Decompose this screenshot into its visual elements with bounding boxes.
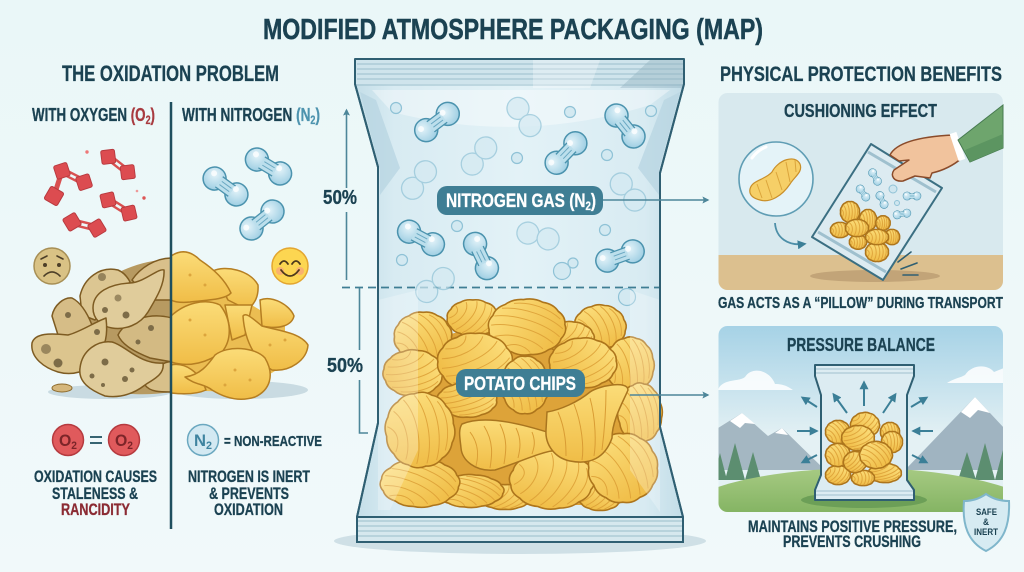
label: with nitrogen: 2: [310, 113, 316, 127]
equation: oxygen reacts: O: [115, 431, 128, 450]
measure: lower 50%: 50%: [327, 355, 363, 377]
small tilted bag: [812, 144, 942, 280]
fill line: [342, 286, 660, 288]
panel: the oxidation problem: [32, 61, 322, 529]
caption: nitrogen inert: & PREVENTS: [209, 484, 289, 503]
caption: oxidation causes: OXIDATION CAUSES: [34, 467, 157, 486]
label: potato chips: POTATO CHIPS: [464, 374, 576, 395]
bag shadow: [334, 528, 706, 554]
equation: nitrogen non-reactive: N: [194, 431, 206, 450]
label: nitrogen gas: [437, 186, 708, 215]
label: nitrogen gas: ): [591, 191, 596, 212]
label: potato chips: [456, 369, 708, 397]
nitrogen molecules: [199, 144, 296, 245]
equation: nitrogen non-reactive: = NON-REACTIVE: [224, 433, 322, 450]
bag folds: [360, 90, 680, 195]
label: with oxygen: 2: [146, 113, 151, 127]
caption: positive pressure: MAINTAINS POSITIVE PRESSURE,: [748, 517, 957, 536]
stale chip pile: [32, 258, 172, 399]
central bag diagram: [323, 59, 708, 554]
equation: oxygen reacts: 2: [71, 440, 77, 452]
panel: physical protection: [713, 63, 1011, 551]
caption: nitrogen inert: [188, 467, 310, 519]
label: with oxygen: ): [151, 105, 155, 125]
icon: happy face: [272, 248, 308, 284]
caption: oxidation causes: RANCIDITY: [61, 500, 130, 519]
title: MODIFIED ATMOSPHERE PACKAGING (MAP): [263, 14, 763, 46]
nitrogen molecules in bag: [390, 93, 656, 307]
icon: chip in bubble: [739, 142, 813, 216]
badge: safe and inert: &: [983, 517, 989, 528]
label: with oxygen: WITH OXYGEN (O: [32, 105, 160, 125]
equation: nitrogen non-reactive: 2: [206, 440, 212, 452]
divider: [170, 102, 172, 529]
icon: sad face: [34, 248, 70, 284]
fresh chip pile: [171, 252, 308, 399]
caption: oxidation causes: STALENESS &: [52, 484, 138, 503]
arrow: to bag: [775, 223, 804, 244]
equation: oxygen reacts: [52, 424, 140, 456]
oxygen molecules: [44, 143, 146, 240]
label: nitrogen gas: NITROGEN GAS (N: [446, 191, 618, 212]
card: pressure balance: [713, 326, 1011, 513]
pressure arrows: [797, 383, 933, 462]
card heading: PRESSURE BALANCE: [787, 335, 935, 355]
label: with nitrogen: ): [315, 105, 320, 125]
caption: nitrogen inert: OXIDATION: [214, 500, 283, 519]
label: with nitrogen: WITH NITROGEN (N: [182, 105, 328, 125]
card: cushioning effect: [718, 93, 1004, 291]
potato chips in bag: [365, 290, 670, 517]
heading: oxidation problem: THE OXIDATION PROBLEM: [62, 61, 279, 86]
caption: positive pressure: [748, 517, 957, 551]
badge: safe and inert: SAFE: [976, 507, 997, 518]
equation: oxygen reacts: O: [59, 431, 72, 450]
badge: safe and inert: INERT: [974, 527, 998, 538]
caption: nitrogen inert: NITROGEN IS INERT: [188, 467, 310, 486]
top seal: [356, 60, 683, 88]
badge: safe and inert: [964, 494, 1009, 551]
bag body: [355, 59, 684, 542]
equation: oxygen reacts: 2: [127, 440, 133, 452]
caption: positive pressure: PREVENTS CRUSHING: [783, 532, 921, 551]
caption: oxidation causes: [34, 467, 157, 519]
measure: lower 50%: [327, 288, 368, 433]
bottom seal: [355, 84, 684, 542]
label: nitrogen gas: 2: [585, 199, 591, 213]
measure: upper 50%: 50%: [323, 187, 357, 209]
impact lines: [898, 252, 918, 275]
card heading: CUSHIONING EFFECT: [784, 101, 937, 121]
bag gloss: [378, 290, 660, 512]
inflated bag: [815, 365, 914, 500]
equation: nitrogen non-reactive: [188, 424, 322, 456]
icon: hand with sleeve: [890, 105, 1003, 181]
